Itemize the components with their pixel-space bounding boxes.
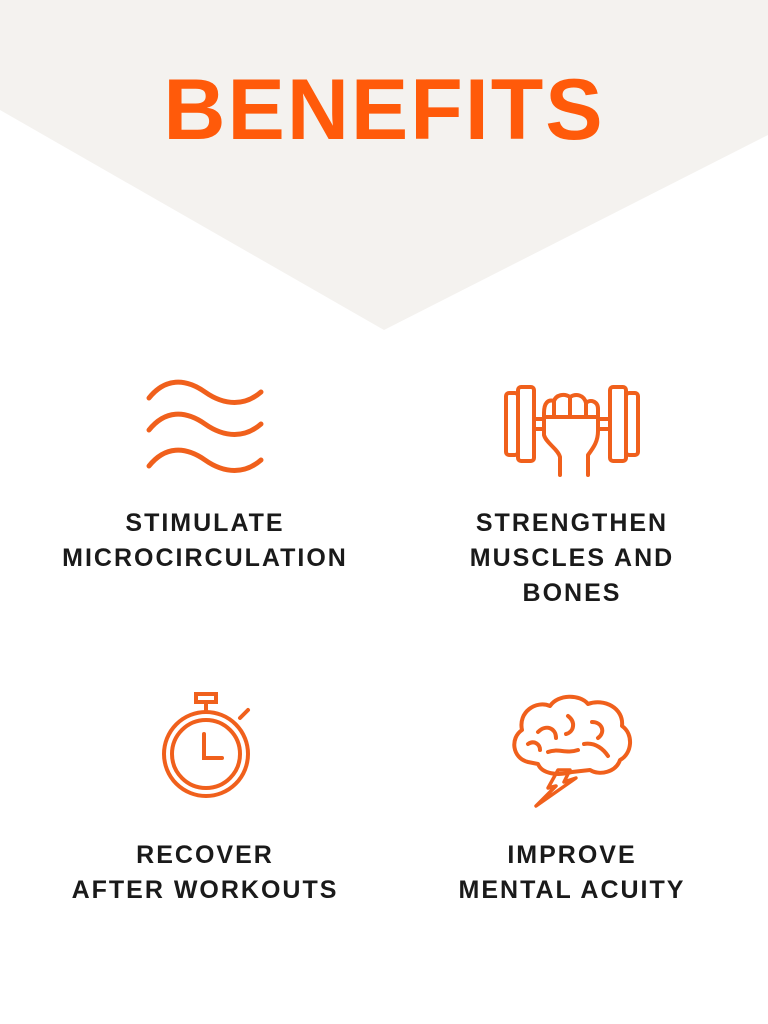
label: recover: RECOVER bbox=[136, 841, 274, 869]
label: improve: IMPROVE bbox=[507, 841, 637, 869]
icon: stopwatch bbox=[162, 692, 250, 798]
label: strengthen: STRENGTHEN bbox=[476, 509, 668, 537]
label: improve bbox=[459, 841, 685, 904]
label: improve: MENTAL ACUITY bbox=[459, 876, 685, 904]
title: BENEFITS bbox=[163, 62, 605, 158]
label: strengthen: BONES bbox=[523, 579, 621, 607]
label: strengthen: MUSCLES AND bbox=[470, 544, 674, 572]
label: recover bbox=[72, 841, 338, 904]
label: strengthen bbox=[470, 509, 674, 607]
label: stimulate: MICROCIRCULATION bbox=[62, 544, 348, 572]
icon: waves bbox=[146, 380, 264, 473]
icon: brain bbox=[512, 694, 632, 808]
label: stimulate: STIMULATE bbox=[125, 509, 285, 537]
icon: dumbbell bbox=[504, 385, 640, 477]
label: stimulate bbox=[62, 509, 348, 572]
label: recover: AFTER WORKOUTS bbox=[72, 876, 338, 904]
